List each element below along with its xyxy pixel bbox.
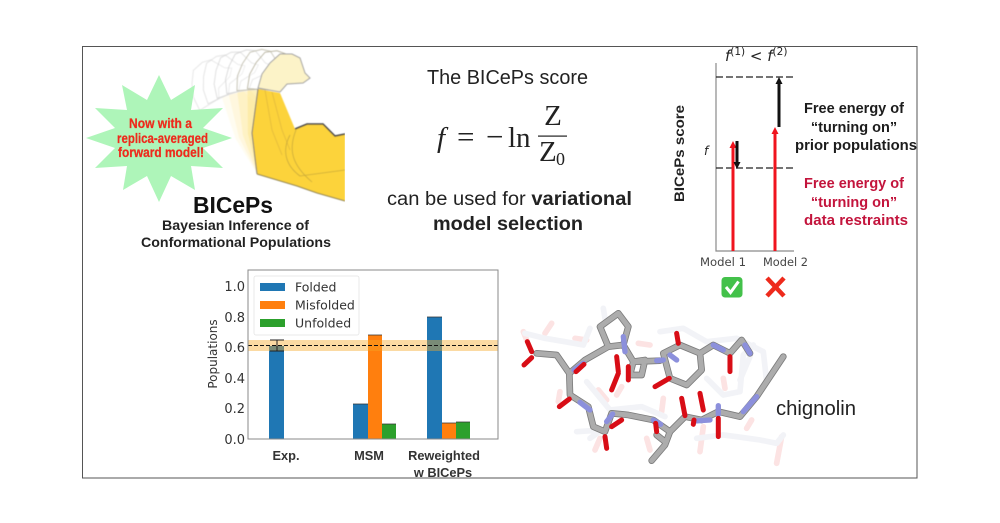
label: chignolin: chignolin: [776, 398, 856, 420]
reference band: [248, 340, 498, 351]
y axis ticks: 0.4: [224, 372, 245, 387]
chart title: f1 less than f2: f: [725, 47, 730, 65]
molecule: chignolin structure: [523, 308, 783, 463]
backbone grey: [537, 313, 783, 461]
legend text: prior populations: “turning on”: [811, 120, 897, 136]
nitrogen atoms: [574, 337, 757, 424]
chart: populations bar chart: [206, 270, 498, 480]
chart title: f1 less than f2: <: [745, 47, 767, 65]
x axis labels: [272, 448, 480, 480]
heading: BICePs: BICePs: [193, 192, 273, 218]
arrow: model 1 data restraints: [730, 141, 736, 251]
arrow: model 2 prior populations: [776, 77, 782, 127]
text: full name of BICePs: [141, 218, 331, 250]
callout: green starburst: forward model!: [118, 144, 204, 160]
text: variational model selection: model selection: [433, 214, 583, 235]
formula: f: [437, 122, 449, 154]
y axis ticks: 0.6: [224, 341, 245, 356]
text: full name of BICePs: Bayesian Inference of: [162, 218, 310, 233]
icon: flexing arm: [192, 48, 345, 202]
x axis labels: Reweighted: [408, 448, 480, 463]
axis label: f: f: [704, 144, 710, 158]
legend text: data restraints: data restraints: [804, 213, 908, 229]
legend text: prior populations: Free energy of: [804, 101, 904, 117]
text: full name of BICePs: Conformational Populations: [141, 235, 331, 250]
text: variational model selection: can be used for variational: [387, 189, 632, 210]
x axis labels: Exp.: [272, 448, 300, 463]
axis label: BICePs score: BICePs score: [671, 105, 687, 202]
y axis ticks: 0.8: [224, 311, 245, 326]
bars: Exp.: [269, 346, 284, 439]
legend: [254, 276, 359, 335]
y axis ticks: 0.0: [224, 433, 245, 448]
x axis labels: w BICePs: [413, 465, 472, 480]
x axis labels: MSM: [354, 448, 384, 463]
arrow: model 2 data restraints: [772, 127, 778, 251]
bars: MSM: [353, 335, 396, 439]
legend text: prior populations: [795, 101, 917, 154]
formula: [437, 100, 567, 169]
text: variational model selection: [387, 189, 632, 235]
legend text: data restraints: “turning on”: [811, 195, 897, 211]
icon: red cross: [767, 278, 784, 296]
chart title: f1 less than f2: (1): [730, 46, 745, 58]
chart: BICePs score by model: [671, 46, 917, 298]
text: score heading: The BICePs score: [427, 67, 588, 89]
x labels: models: Model 2: [763, 255, 808, 269]
icon: green check: [722, 277, 742, 298]
formula: Z: [544, 100, 562, 132]
backbone dark outline: [537, 313, 783, 461]
y axis ticks: 1.0: [224, 280, 245, 295]
legend text: data restraints: Free energy of: [804, 176, 904, 192]
formula: Z: [539, 136, 557, 168]
arrow: model 1 prior populations: [734, 141, 740, 169]
y axis ticks: [224, 280, 245, 448]
callout: green starburst: replica-averaged: [117, 130, 208, 146]
legend: Misfolded: [295, 298, 355, 312]
ghost conformers: [523, 308, 783, 463]
x labels: models: Model 1: [700, 255, 746, 269]
callout: green starburst: Now with a: [129, 115, 192, 131]
formula: −: [486, 119, 503, 154]
y axis label: Populations: [206, 319, 220, 389]
legend: Unfolded: [295, 316, 351, 330]
formula: =: [457, 119, 474, 154]
chart title: f1 less than f2: (2): [773, 46, 787, 58]
legend text: data restraints: [804, 176, 908, 229]
error bar: [270, 340, 284, 351]
x labels: models: [700, 255, 808, 269]
chart title: f1 less than f2: f: [767, 47, 773, 65]
legend: Folded: [295, 280, 336, 294]
panel: BICePs logo: [86, 43, 345, 250]
bars: Reweighted w BICePs: [427, 317, 470, 439]
panel: BICePs score formula: [387, 67, 632, 235]
formula: 0: [556, 149, 565, 169]
oxygen atoms: [524, 333, 730, 448]
panel border: [82, 46, 917, 478]
callout: green starburst: [86, 75, 232, 202]
legend text: prior populations: prior populations: [795, 138, 917, 154]
formula: ln: [508, 122, 531, 154]
y axis ticks: 0.2: [224, 402, 245, 417]
